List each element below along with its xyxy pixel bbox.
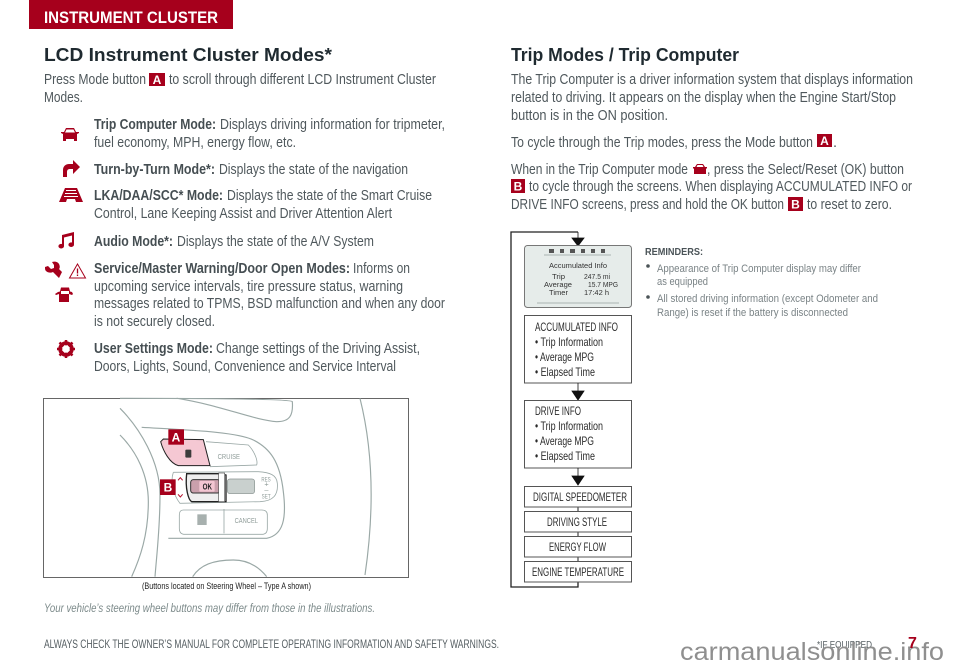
mode: trip computer [94, 117, 445, 151]
cycle instruction: A [820, 134, 829, 148]
footer note: ALWAYS CHECK THE OWNER’S MANUAL FOR COMPLETE OPERATING INFORMATION AND SAFETY WARNINGS. [44, 637, 499, 651]
reminders: REMINDERS: [645, 247, 703, 258]
select reset instruction: B [514, 180, 523, 194]
icon: lane [59, 188, 83, 202]
reminders: as equipped [657, 276, 708, 288]
select reset instruction [511, 162, 912, 213]
mode: trip computer: Displays driving information for tripmeter, [220, 117, 445, 133]
arrow: to digital speedometer [572, 468, 584, 485]
cycle instruction: To cycle through the Trip modes, press the Mode button [511, 135, 813, 151]
icon: warning triangle [70, 264, 86, 278]
select reset instruction: B [791, 198, 800, 212]
box: drive info: DRIVE INFO [535, 404, 581, 418]
select reset instruction: When in the Trip Computer mode [511, 162, 688, 178]
icon: gear [57, 340, 75, 358]
heading: LCD modes: LCD Instrument Cluster Modes* [44, 44, 333, 65]
reminders [645, 247, 878, 319]
display screen: 15.7 MPG [588, 282, 618, 289]
arrow: into display [572, 232, 584, 246]
box: energy flow [524, 536, 632, 557]
reminders: Appearance of Trip Computer display may differ [657, 263, 861, 275]
mode: trip computer: Trip Computer Mode: [94, 117, 216, 133]
box: digital speedometer [524, 486, 632, 507]
steering wheel illustration: + [264, 479, 269, 488]
steering wheel illustration: CANCEL [235, 518, 258, 525]
display screen: Trip [552, 274, 565, 281]
mode: LKA: LKA/DAA/SCC* Mode: [94, 188, 223, 204]
arrow: to drive info [572, 383, 584, 400]
steering wheel illustration: CRUISE [218, 454, 240, 461]
steering wheel illustration: OK [203, 482, 212, 492]
box: driving style [524, 512, 632, 532]
display screen [524, 246, 632, 308]
trip computer description: related to driving. It appears on the display when the Engine Start/Stop [511, 90, 896, 106]
box: accumulated info [524, 316, 632, 383]
mode: audio [94, 234, 374, 250]
steering wheel illustration: SET [262, 494, 271, 500]
select reset instruction: DRIVE INFO screens, press and hold the OK button [511, 197, 784, 213]
mode: user settings: Doors, Lights, Sound, Convenience and Service Interval [94, 359, 396, 375]
reminders: All stored driving information (except Odometer and [657, 293, 878, 305]
box: accumulated info: • Average MPG [535, 350, 594, 364]
box: engine temperature [524, 562, 632, 582]
icon: car [61, 128, 79, 141]
mode: service warning: messages related to TPMS, BSD malfunction and when any door [94, 296, 445, 312]
reminders: Range) is reset if the battery is disconnected [657, 307, 848, 319]
mode: trip computer: fuel economy, MPH, energy flow, etc. [94, 135, 296, 151]
flow loop line [511, 232, 578, 587]
icon: door open [55, 288, 73, 302]
intro text: to scroll through different LCD Instrument Cluster [169, 72, 436, 88]
icon: wrench [45, 262, 62, 278]
box: drive info: • Average MPG [535, 434, 594, 448]
mode: turn by turn: Displays the state of the navigation [219, 162, 408, 178]
mode: audio: Audio Mode*: [94, 234, 173, 250]
select reset instruction: to reset to zero. [807, 197, 892, 213]
box: drive info [524, 400, 632, 468]
trip computer description: button is in the ON position. [511, 108, 668, 124]
display screen: Timer [549, 290, 569, 297]
mode: service warning: upcoming service intervals, tire pressure status, warning [94, 279, 403, 295]
intro text: A [153, 73, 162, 87]
display screen: Accumulated Info [549, 263, 607, 270]
box: energy flow: ENERGY FLOW [549, 540, 606, 554]
box: driving style: DRIVING STYLE [547, 515, 607, 529]
steering wheel caption: (Buttons located on Steering Wheel – Type A shown) [142, 581, 311, 591]
mode: service warning [94, 261, 445, 330]
mode: turn by turn [94, 162, 408, 178]
mode: LKA: Control, Lane Keeping Assist and Driver Attention Alert [94, 206, 392, 222]
box: accumulated info: ACCUMULATED INFO [535, 320, 618, 334]
mode: user settings [94, 341, 420, 375]
watermark: carmanualsonline.info [680, 638, 944, 666]
icon: music note [58, 232, 74, 249]
select reset instruction: , press the Select/Reset (OK) button [707, 162, 904, 178]
display screen: 17:42 h [584, 290, 609, 297]
mode: service warning: is not securely closed. [94, 314, 215, 330]
mode: user settings: Change settings of the Driving Assist, [216, 341, 420, 357]
box: digital speedometer: DIGITAL SPEEDOMETER [533, 490, 627, 504]
intro text [44, 72, 436, 106]
intro text: Modes. [44, 90, 83, 106]
mode: audio: Displays the state of the A/V System [177, 234, 374, 250]
mode: service warning: Service/Master Warning/Door Open Modes: [94, 261, 350, 277]
steering wheel illustration: A [172, 431, 181, 445]
box: accumulated info: • Trip Information [535, 335, 603, 349]
mode: LKA [94, 188, 432, 222]
steering wheel illustration: – [264, 485, 269, 494]
heading: trip modes: Trip Modes / Trip Computer [511, 44, 739, 65]
connector lines [577, 507, 579, 561]
box: drive info: • Elapsed Time [535, 449, 595, 463]
box: engine temperature: ENGINE TEMPERATURE [532, 565, 624, 579]
trip computer description [511, 72, 913, 124]
icon: turn arrow [63, 160, 80, 177]
header tab [29, 0, 233, 29]
cycle instruction: . [833, 135, 837, 151]
mode: LKA: Displays the state of the Smart Cruise [227, 188, 432, 204]
steering wheel illustration [44, 398, 408, 578]
mode: user settings: User Settings Mode: [94, 341, 213, 357]
illustration disclaimer: Your vehicle’s steering wheel buttons may differ from those in the illustrations. [44, 603, 375, 615]
box: accumulated info: • Elapsed Time [535, 365, 595, 379]
steering wheel illustration: B [164, 481, 173, 495]
display screen: 247.5 mi [584, 274, 610, 281]
if equipped note: *IF EQUIPPED [817, 640, 872, 651]
mode: service warning: Informs on [353, 261, 410, 277]
steering wheel illustration: RES [261, 477, 271, 483]
intro text: Press Mode button [44, 72, 146, 88]
mode: turn by turn: Turn-by-Turn Mode*: [94, 162, 215, 178]
header tab: INSTRUMENT CLUSTER [44, 9, 218, 27]
display screen: Average [544, 282, 572, 289]
page number: 7 [908, 635, 917, 652]
box: drive info: • Trip Information [535, 419, 603, 433]
